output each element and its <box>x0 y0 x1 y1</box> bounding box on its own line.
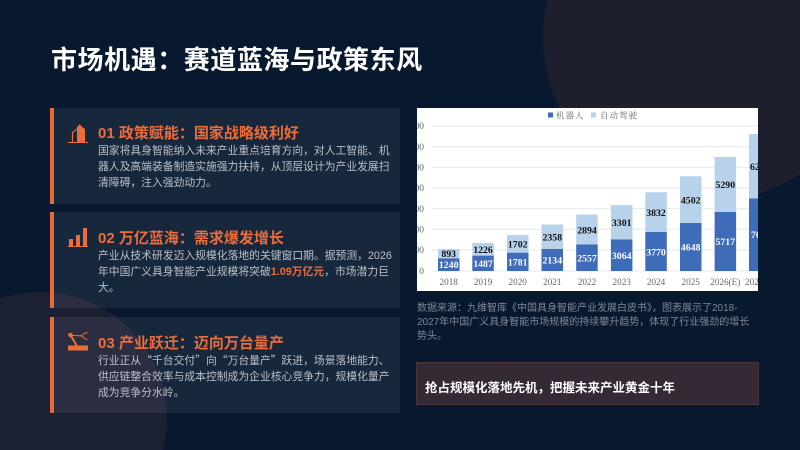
x axis labels: 2020 <box>509 277 527 287</box>
driving values: 4502 <box>681 196 701 206</box>
driving values <box>441 162 760 260</box>
text: policy <box>98 144 390 189</box>
text: policy: 国家将具身智能纳入未来产业重点培育方向，对人工智能、机 <box>98 145 390 157</box>
legend: 机器人 <box>556 110 585 120</box>
data source caption <box>417 302 749 342</box>
panel: policy <box>50 108 400 204</box>
robot values <box>439 230 761 271</box>
robot values: 2557 <box>577 254 597 264</box>
driving values: 3832 <box>646 208 666 219</box>
x axis labels <box>440 277 764 287</box>
panel: market <box>50 212 400 308</box>
x axis labels: 2026(E) <box>710 277 740 287</box>
driving values: 3301 <box>612 218 632 229</box>
driving values: 1702 <box>508 240 528 250</box>
text: policy: 器人及高端装备制造实施强力扶持，从顶层设计为产业发展扫 <box>98 161 390 173</box>
heading: market: 02 万亿蓝海：需求爆发增长 <box>98 230 284 247</box>
robot values: 1487 <box>473 259 493 270</box>
heading: industry: 03 产业跃迁：迈向万台量产 <box>98 335 284 352</box>
text: industry <box>98 352 390 399</box>
x axis labels: 2023 <box>613 277 631 287</box>
driving values: 5290 <box>716 180 735 191</box>
robot values: 3770 <box>646 248 666 258</box>
text: market: 产业从技术研发迈入规模化落地的关键窗口期。据预测，2026 <box>98 250 392 262</box>
driving values: 2358 <box>543 232 562 244</box>
robot values: 1240 <box>439 260 459 271</box>
robot values: 1781 <box>508 258 528 268</box>
callout text: 抢占规模化落地先机，把握未来产业黄金十年 <box>425 381 675 395</box>
x axis labels: 2021 <box>543 277 562 287</box>
x axis labels: 2024 <box>647 277 666 287</box>
icon: bar chart <box>68 228 88 247</box>
icon: buildings <box>68 124 88 143</box>
robot values: 4648 <box>681 242 701 254</box>
bar chart <box>417 108 758 291</box>
y axis labels <box>400 122 424 277</box>
text: market: 年中国广义具身智能产业规模将突破1.09万亿元，市场潜力巨 <box>98 266 389 278</box>
data source caption: 势头。 <box>417 331 447 342</box>
robot values: 3064 <box>612 251 632 262</box>
icon: robot arm <box>68 332 88 350</box>
robot values: 2134 <box>543 256 562 266</box>
robot bars <box>438 198 758 271</box>
legend <box>548 110 638 120</box>
panel: industry <box>50 317 400 413</box>
driving values: 2894 <box>577 226 597 236</box>
text: market: 大。 <box>98 282 120 294</box>
y axis labels: 0 <box>419 267 424 277</box>
x axis labels: 2018 <box>440 277 458 287</box>
data source caption: 数据来源：九维智库《中国具身智能产业发展白皮书》，图表展示了2018- <box>417 303 738 314</box>
text: industry: 供应链整合效率与成本控制成为企业核心竞争力，规模化量产 <box>98 371 390 383</box>
title: 市场机遇：赛道蓝海与政策东风 <box>51 45 423 75</box>
callout <box>416 362 759 405</box>
heading: policy: 01 政策赋能：国家战略级利好 <box>98 125 299 142</box>
driving values: 893 <box>441 249 456 260</box>
text: market <box>98 250 392 294</box>
text: industry: 成为竞争分水岭。 <box>98 387 184 399</box>
data source caption: 2027年中国广义具身智能市场规模的持续攀升趋势，体现了行业强劲的增长 <box>417 317 749 328</box>
x axis labels: 2022 <box>578 277 597 287</box>
legend: 自动驾驶 <box>600 110 638 120</box>
text: industry: 行业正从“千台交付”向“万台量产”跃进，场景落地能力、 <box>98 352 390 368</box>
driving values: 1226 <box>473 245 493 256</box>
robot values: 5717 <box>716 237 735 248</box>
x axis labels: 2025 <box>682 277 700 287</box>
driving bars <box>438 134 758 258</box>
text: policy: 清障碍，注入强劲动力。 <box>98 177 217 189</box>
x axis labels: 2019 <box>474 277 493 287</box>
